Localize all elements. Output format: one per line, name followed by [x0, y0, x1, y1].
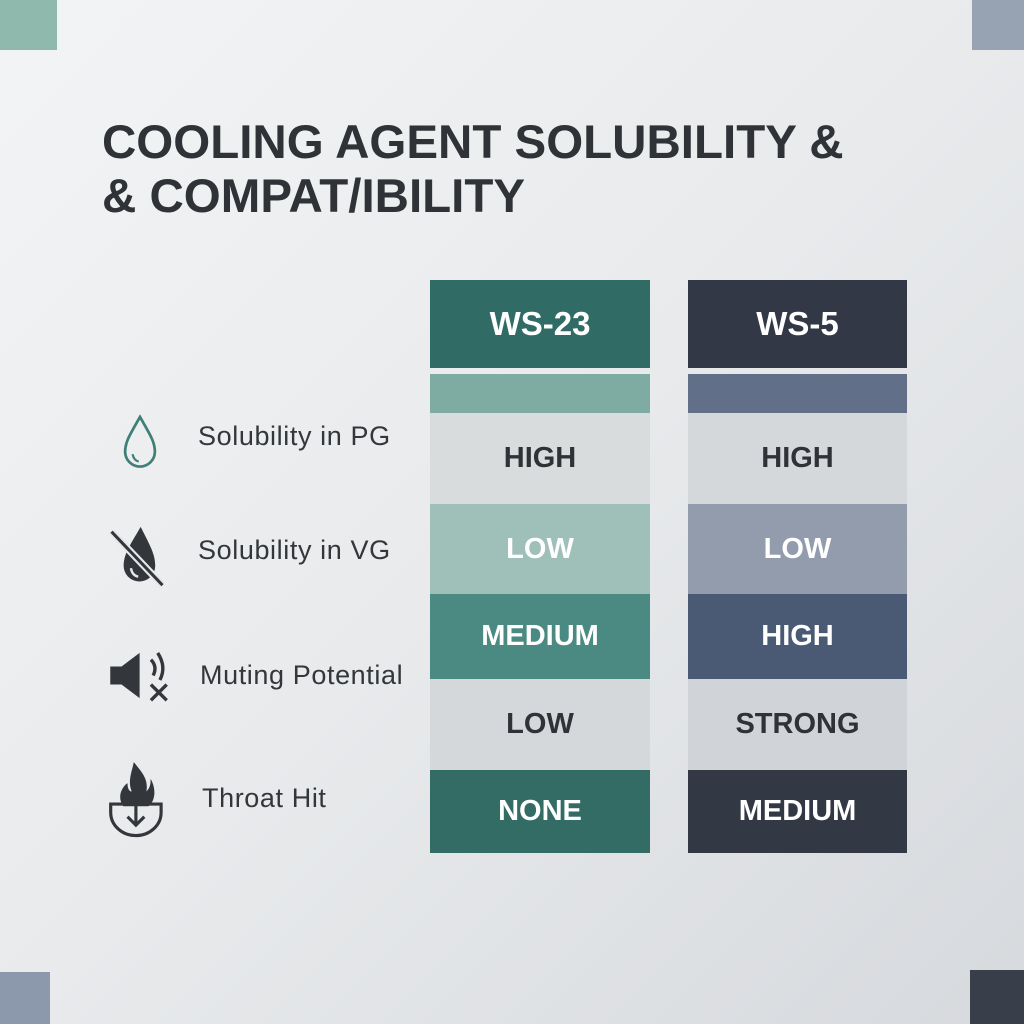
- column: WS-5: [688, 280, 907, 853]
- label: Muting Potential: Muting Potential: [200, 660, 403, 690]
- header WS-5: WS-5: [756, 305, 839, 342]
- column: WS-5: HIGH: [761, 620, 834, 652]
- icon: flame bowl: [109, 762, 163, 838]
- column: WS-23: HIGH: [504, 442, 576, 474]
- column: WS-5: HIGH: [761, 442, 834, 474]
- title: [102, 116, 844, 223]
- column: WS-23: NONE: [498, 795, 582, 827]
- header WS-23: WS-23: [490, 305, 590, 342]
- icon: muted speaker: [110, 652, 168, 702]
- header WS-23: [430, 280, 650, 368]
- corner: bottom-right: [970, 970, 1024, 1024]
- icon: crossed drop: [110, 527, 164, 586]
- corner: top-right: [972, 0, 1024, 50]
- column: WS-23: [430, 280, 650, 853]
- label: Solubility in VG: Solubility in VG: [198, 535, 391, 565]
- column: WS-23: MEDIUM: [481, 620, 599, 652]
- label: Solubility in PG: Solubility in PG: [198, 421, 391, 451]
- column: WS-5: MEDIUM: [739, 795, 856, 827]
- title: & COMPAT/IBILITY: [102, 170, 525, 223]
- column: WS-23: LOW: [506, 708, 574, 740]
- corner: top-left: [0, 0, 57, 50]
- column: WS-5: STRONG: [735, 708, 860, 740]
- icon: water drop: [124, 414, 156, 468]
- row labels: [109, 414, 403, 838]
- title: COOLING AGENT SOLUBILITY &: [102, 116, 844, 169]
- corner: bottom-left: [0, 972, 50, 1024]
- column: WS-23: LOW: [506, 532, 574, 564]
- label: Throat Hit: Throat Hit: [202, 783, 327, 813]
- column: WS-5: LOW: [764, 532, 831, 564]
- header WS-5: [688, 280, 907, 368]
